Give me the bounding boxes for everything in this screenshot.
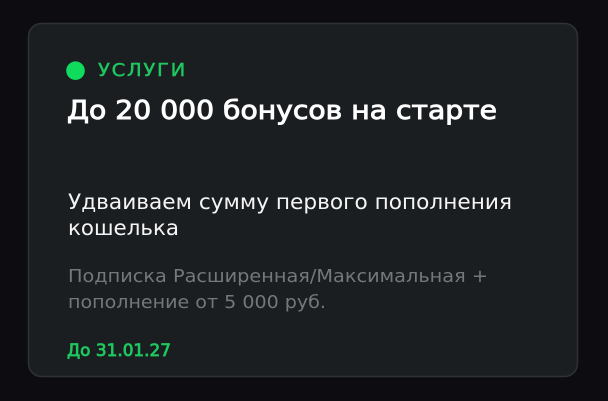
category label: УСЛУГИ: [98, 61, 187, 81]
panel: services offer card: [28, 24, 578, 376]
heading: До 20 000 бонусов на старте: [67, 96, 497, 126]
offer conditions: [68, 266, 488, 313]
offer description: Удваиваем сумму первого пополнения: [68, 190, 512, 214]
icon: green status dot: [66, 61, 85, 80]
offer conditions: пополнение от 5 000 руб.: [68, 292, 326, 313]
offer description: [68, 190, 512, 240]
offer conditions: Подписка Расширенная/Максимальная +: [68, 266, 488, 287]
offer description: кошелька: [68, 216, 179, 240]
expiry date: До 31.01.27: [67, 341, 171, 361]
